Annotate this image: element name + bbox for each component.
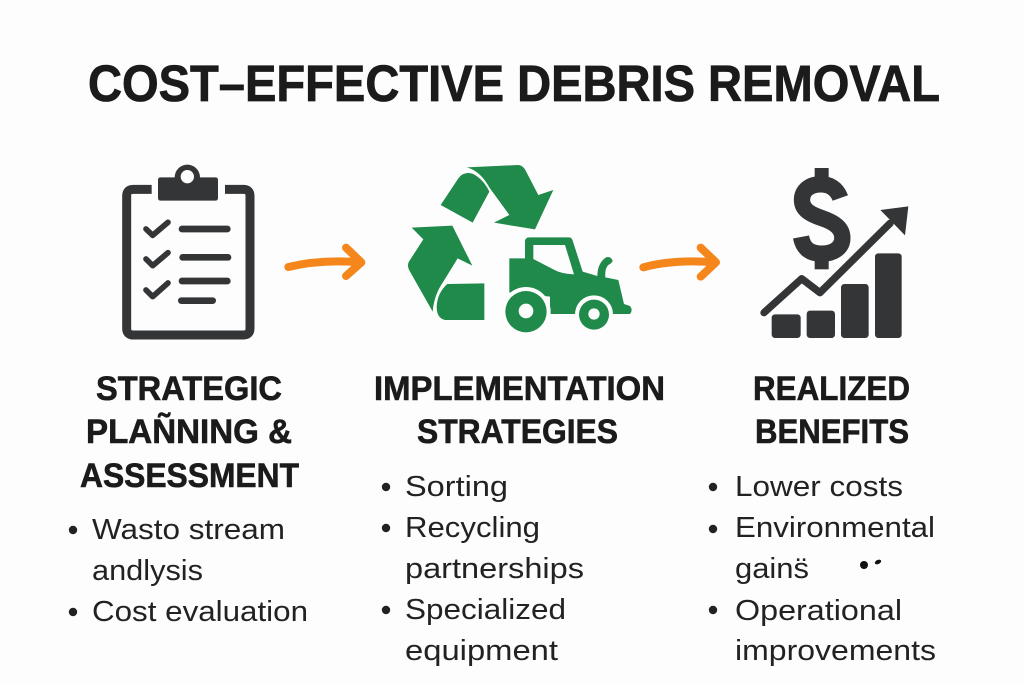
icon: recycling symbol: [408, 165, 553, 320]
list: planning items: [69, 514, 308, 628]
list: planning items: Wasto stream: [92, 514, 285, 546]
arrow: planning to implementation: [288, 248, 361, 276]
heading: strategic planning and assessment: PLAÑNING &: [86, 413, 292, 451]
list: benefit items: gains̈: [735, 553, 809, 585]
list: benefit items: Environmental: [735, 512, 935, 544]
heading: implementation strategies: STRATEGIES: [417, 413, 618, 451]
heading: strategic planning and assessment: ASSESSMENT: [80, 457, 299, 495]
heading: realized benefits: REALIZED: [753, 370, 910, 408]
heading: realized benefits: BENEFITS: [755, 413, 909, 451]
heading: realized benefits: [753, 370, 910, 451]
heading: strategic planning and assessment: [80, 370, 299, 495]
list: implementation items: partnerships: [405, 553, 584, 585]
icon: wheel loader: [501, 237, 632, 336]
list: implementation items: Sorting: [405, 471, 508, 503]
list: implementation items: Specialized: [405, 594, 566, 626]
list: implementation items: equipment: [405, 635, 558, 667]
arrow: implementation to benefits: [643, 248, 716, 277]
list: benefit items: [709, 471, 936, 667]
list: benefit items: Lower costs: [735, 471, 903, 503]
heading: strategic planning and assessment: STRATEGIC: [96, 370, 282, 408]
list: implementation items: [382, 471, 584, 667]
title: COST–EFFECTIVE DEBRIS REMOVAL: [88, 55, 940, 112]
heading: implementation strategies: IMPLEMENTATION: [374, 370, 665, 408]
list: implementation items: Recycling: [405, 512, 540, 544]
list: benefit items: Operational: [735, 595, 902, 627]
icon: clipboard checklist: [127, 165, 250, 335]
list: planning items: Cost evaluation: [92, 596, 308, 628]
icon: dollar sign and growth chart: [764, 168, 908, 338]
list: planning items: andlysis: [92, 555, 203, 587]
list: benefit items: improvements: [735, 635, 936, 667]
heading: implementation strategies: [374, 370, 665, 451]
